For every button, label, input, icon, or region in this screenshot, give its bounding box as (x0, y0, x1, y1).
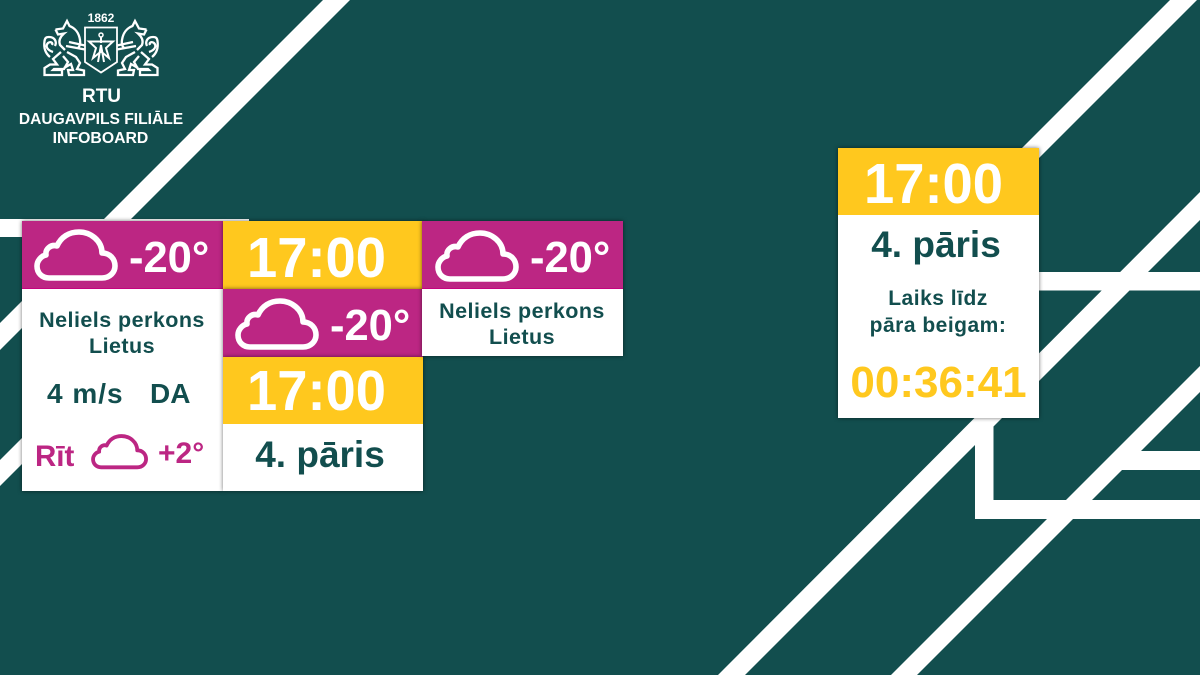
logo caption: INFOBOARD (53, 130, 148, 147)
temperature: -20° (530, 234, 610, 282)
panel: class countdown: 17:00 (864, 152, 1003, 215)
panel: short weather card (422, 221, 623, 356)
panel: stacked cards (223, 221, 423, 491)
weather block (223, 289, 423, 357)
panel: stacked cards: -20° (330, 302, 410, 350)
panel: stacked cards: 17:00 (247, 226, 386, 289)
icon: right lion (117, 21, 158, 75)
tomorrow forecast (35, 436, 204, 473)
countdown timer: 00:36:41 (850, 358, 1027, 407)
weather description (439, 299, 605, 349)
icon: left lion (44, 21, 85, 75)
countdown header (838, 148, 1039, 215)
weather card header (22, 221, 223, 289)
lower block shadow (223, 357, 423, 491)
icon: cloud (438, 233, 516, 279)
icon: shield with star and compass (85, 28, 117, 72)
logo caption: DAUGAVPILS FILIĀLE (19, 109, 183, 128)
panel: stacked cards: 17:00 (247, 359, 386, 422)
short card shadow (422, 221, 623, 356)
countdown label (870, 287, 1006, 337)
weather description: Neliels perkons (39, 308, 205, 332)
tomorrow forecast: +2° (158, 437, 204, 470)
time block (223, 221, 423, 289)
logo: RTU crest (44, 11, 158, 75)
weather description (39, 308, 205, 358)
countdown label: pāra beigam: (870, 314, 1006, 337)
time block lower (223, 357, 423, 424)
class number: 4. pāris (871, 224, 1001, 265)
panel: full weather card (22, 221, 223, 491)
tomorrow forecast: Rīt (35, 440, 74, 473)
class block text: 4. pāris (255, 434, 385, 475)
card shadow (22, 221, 223, 491)
wind speed and direction: DA (150, 378, 190, 409)
weather description: Lietus (89, 334, 155, 358)
logo caption (19, 86, 183, 147)
wind speed and direction (47, 378, 190, 409)
countdown shadow (838, 148, 1039, 418)
weather description: Neliels perkons (439, 299, 605, 323)
logo caption: RTU (82, 86, 121, 107)
icon: cloud (37, 232, 115, 278)
logo year: 1862 (88, 11, 115, 25)
temperature: -20° (129, 234, 209, 282)
short card header (422, 221, 623, 289)
weather description: Lietus (489, 325, 555, 349)
panel: class countdown (838, 148, 1039, 418)
countdown label: Laiks līdz (888, 287, 988, 310)
wind speed and direction: 4 m/s (47, 378, 124, 409)
